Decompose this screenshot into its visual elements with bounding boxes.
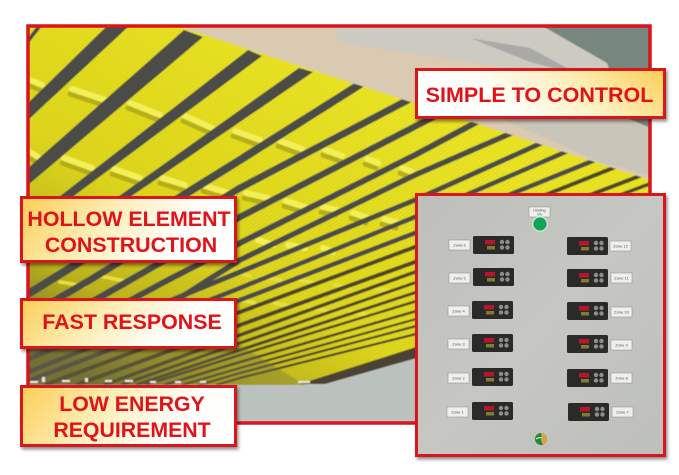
element joint tabs [30, 80, 412, 252]
pale upper beam [334, 28, 609, 68]
zone 9 tag [611, 340, 632, 350]
zone 2 controller [472, 368, 513, 386]
callout: fast response: FAST RESPONSE [42, 310, 222, 334]
zone 1 tag [447, 407, 468, 417]
tan beam above the elements [182, 28, 648, 180]
zone 12 tag [610, 241, 631, 251]
callout: low energy requirement: LOW ENERGY [59, 392, 205, 416]
callout: simple to control: SIMPLE TO CONTROL [426, 83, 653, 107]
zone 7 tag: Zone 7 [616, 410, 630, 414]
icon: round green and orange logo [535, 433, 547, 445]
zone 2 tag: Zone 2 [452, 376, 466, 380]
grey-green upper corner [544, 28, 648, 128]
grey wall under the ceiling [30, 358, 415, 422]
zone 8 controller [567, 369, 608, 387]
zone 9 tag: Zone 9 [615, 342, 629, 348]
callout: hollow element construction: HOLLOW ELEMENT [27, 207, 231, 231]
dark underside of ceiling edge [300, 346, 420, 384]
zone 8 tag [611, 373, 632, 383]
lower joint tabs [60, 272, 390, 314]
zone 5 tag [449, 273, 470, 283]
zone 1 tag: Zone 1 [451, 410, 465, 414]
zone 2 tag [448, 373, 469, 383]
callout: simple to control [416, 70, 664, 118]
zone 6 tag: Zone 6 [453, 242, 467, 248]
zone 11 controller [567, 269, 608, 287]
zone 7 tag [612, 407, 633, 417]
dark gaps between elements [30, 28, 314, 196]
heating on label: Heating [533, 208, 546, 212]
lower beam highlight [504, 119, 648, 174]
yellow ceiling elements [28, 26, 660, 386]
zone 8 tag: Zone 8 [615, 376, 629, 380]
icon: green indicator lamp [533, 217, 547, 231]
zone 10 tag [611, 307, 632, 317]
callout: hollow element construction: CONSTRUCTION [45, 233, 217, 257]
zone 4 tag [448, 306, 469, 316]
zone 4 tag: Zone 4 [452, 308, 466, 314]
heating on label: On [537, 212, 542, 216]
joint shadows [28, 85, 410, 228]
panel: zone control cabinet [416, 194, 664, 456]
zone 12 controller [567, 237, 608, 255]
callout: low energy requirement: REQUIREMENT [53, 418, 211, 442]
zone 11 tag [611, 273, 632, 283]
zone 3 tag: Zone 3 [452, 342, 466, 346]
zone 3 tag [448, 339, 469, 349]
callout: low energy requirement [22, 386, 236, 446]
zone 7 controller [568, 403, 609, 421]
zone 5 tag: Zone 5 [453, 276, 467, 280]
white clips along far edge [30, 377, 310, 383]
zone 10 controller [567, 302, 608, 320]
muted olive far end [28, 345, 305, 385]
zone 6 tag [449, 240, 470, 250]
zone 11 tag: Zone 11 [614, 276, 629, 280]
callout: hollow element construction [22, 198, 236, 262]
beam shadow [472, 38, 568, 68]
zone 6 controller [473, 236, 514, 254]
zone 4 controller [472, 301, 513, 319]
zone 3 controller [472, 334, 513, 352]
callout: fast response [22, 300, 236, 348]
zone 1 controller [472, 402, 513, 420]
zone 12 tag: Zone 12 [613, 244, 629, 248]
zone 10 tag: Zone 10 [614, 310, 630, 314]
zone 9 controller [567, 335, 608, 353]
heating on label [529, 207, 550, 217]
zone 5 controller [473, 268, 514, 286]
